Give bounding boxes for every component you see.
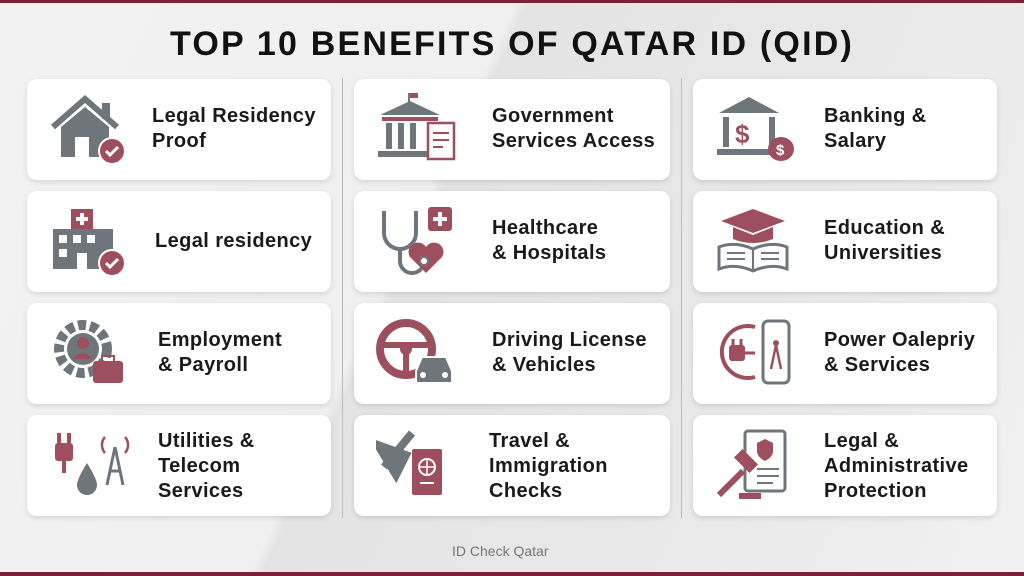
icon: steering wheel car <box>376 319 451 382</box>
panel: education: Universities <box>824 242 942 264</box>
panel: government services: Services Access <box>492 130 655 152</box>
panel: employment: Employment <box>158 329 282 351</box>
panel: legal residency <box>27 191 331 292</box>
footer: ID Check Qatar <box>452 543 548 559</box>
panel: power services: & Services <box>824 354 930 376</box>
panel: legal administrative: Legal & <box>824 430 899 452</box>
panel: travel: Immigration <box>489 455 608 477</box>
panel: driving <box>354 303 670 404</box>
panel: utilities: Telecom <box>158 455 240 477</box>
panel: healthcare: & Hospitals <box>492 242 606 264</box>
panel: education: Education & <box>824 217 945 239</box>
icon: plug phone <box>720 320 790 384</box>
panel: banking: Banking & <box>824 105 926 127</box>
panel: legal administrative: Protection <box>824 480 927 502</box>
icon: house check <box>51 95 124 163</box>
panel: driving: & Vehicles <box>492 354 596 376</box>
icon: bank coins <box>717 97 794 161</box>
panel: employment: & Payroll <box>158 354 248 376</box>
panel: legal administrative: Administrative <box>824 455 969 477</box>
panel: driving: Driving License <box>492 329 647 351</box>
panel: power services: Power Oaleрriy <box>824 329 975 351</box>
icon: graduation cap book <box>718 209 788 273</box>
icon: plane passport <box>376 430 442 495</box>
panel: employment <box>27 303 331 404</box>
panel: healthcare <box>354 191 670 292</box>
icon: bank coins: $ <box>735 119 750 149</box>
panel: banking: Salary <box>824 130 886 152</box>
panel: government services <box>354 79 670 180</box>
icon: plug drop tower <box>55 433 130 495</box>
panel: education <box>693 191 997 292</box>
panel: legal administrative <box>693 415 997 516</box>
panel: banking <box>693 79 997 180</box>
panel: travel: Travel & <box>489 430 570 452</box>
panel: travel: Checks <box>489 480 563 502</box>
panel: utilities: Utilities & <box>158 430 255 452</box>
panel: legal residency proof: Legal Residency <box>152 105 316 127</box>
panel: travel <box>354 415 670 516</box>
icon: gavel document <box>716 430 786 499</box>
title: TOP 10 BENEFITS OF QATAR ID (QID) <box>170 25 854 63</box>
panel: government services: Government <box>492 105 614 127</box>
icon: government building <box>378 93 456 160</box>
panel: legal residency proof: Proof <box>152 130 206 152</box>
panel: utilities <box>27 415 331 516</box>
panel: legal residency proof <box>27 79 331 180</box>
panel: legal residency: Legal residency <box>155 230 312 252</box>
icon: hospital building check <box>53 209 124 275</box>
panel: utilities: Services <box>158 480 244 502</box>
icon: stethoscope heart <box>382 207 452 275</box>
icon: gear person briefcase <box>54 320 123 383</box>
icon: bank coins: $ <box>776 142 785 159</box>
panel: healthcare: Healthcare <box>492 217 598 239</box>
panel: power services <box>693 303 997 404</box>
